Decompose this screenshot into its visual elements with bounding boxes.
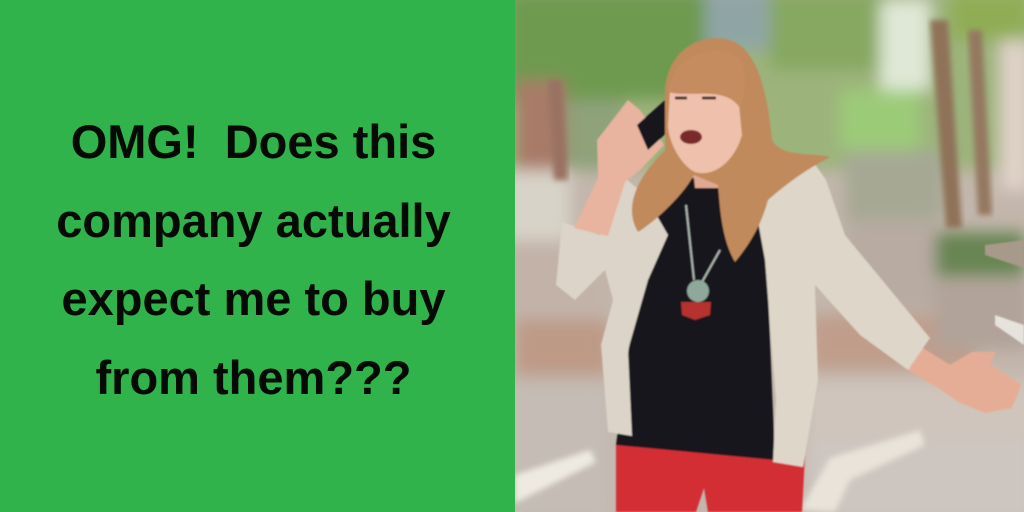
- woman figure: [556, 38, 1021, 512]
- necklace: [686, 205, 720, 282]
- hair: [632, 38, 830, 262]
- headline text: expect me to buy: [62, 272, 445, 325]
- neck: [692, 160, 725, 188]
- blurred background: trees and pavement: [505, 0, 1024, 512]
- panel: green headline panel: [0, 0, 515, 512]
- headline text: from them???: [96, 351, 411, 404]
- outstretched forearm and hand: [908, 345, 1021, 413]
- face: [668, 86, 742, 173]
- photo: woman on phone in a courtyard: [515, 0, 1024, 512]
- black top: [616, 178, 775, 460]
- hair fringe: [668, 51, 745, 108]
- raised forearm and hand: [574, 100, 664, 236]
- cardigan right side: [755, 160, 930, 467]
- cardigan left side and sleeve: [556, 178, 668, 436]
- phone: [637, 100, 672, 150]
- headline text: company actually: [56, 194, 451, 247]
- headline text: OMG! Does this: [71, 115, 436, 168]
- headline text: [56, 115, 451, 404]
- mouth: [680, 130, 702, 144]
- red trousers: [616, 445, 805, 512]
- eyes: [675, 96, 716, 100]
